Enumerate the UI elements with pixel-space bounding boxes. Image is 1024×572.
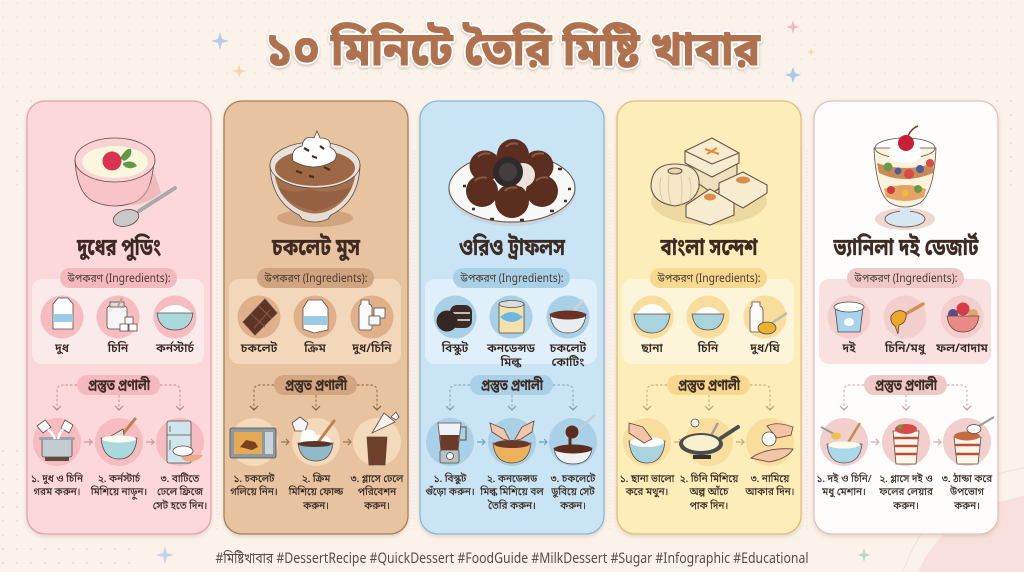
ingredient: sugar: চিনি bbox=[697, 340, 719, 357]
panel: vanilla yogurt dessert bbox=[814, 101, 998, 534]
method heading with arrows: প্রস্তুত প্রণালী bbox=[875, 376, 938, 397]
ingredients panel bbox=[229, 268, 401, 364]
panel: bengali sandesh bbox=[617, 101, 801, 534]
ingredient: biscuit: বিস্কুট bbox=[441, 340, 469, 357]
ingredients panel: উপকরণ (Ingredients): bbox=[657, 271, 760, 287]
step arrow bbox=[281, 439, 289, 445]
step arrow bbox=[736, 439, 744, 445]
hashtag footer: #মিষ্টিখাবার #DessertRecipe #QuickDessert #FoodGuide #MilkDessert #Sugar #Infographic #Educational bbox=[216, 550, 808, 569]
ingredient: sugar bbox=[686, 296, 730, 357]
step 1: মধু মেশান। bbox=[821, 487, 866, 500]
ingredient: chocolate coating: চকলেট bbox=[549, 340, 587, 357]
ingredient: cream: ক্রিম bbox=[303, 340, 326, 357]
sparkle decorations bbox=[156, 20, 871, 564]
title: ১০ মিনিটে তৈরি মিষ্টি খাবার bbox=[266, 21, 761, 85]
step arrow bbox=[933, 439, 941, 445]
step 2 bbox=[479, 418, 544, 514]
ingredient: milk and ghee bbox=[744, 296, 787, 357]
method heading with arrows: প্রস্তুত প্রণালী bbox=[88, 376, 151, 397]
step 2: অল্প আঁচে bbox=[689, 486, 729, 500]
method heading with arrows bbox=[643, 375, 774, 410]
ingredient: condensed milk: মিল্ক bbox=[500, 354, 522, 371]
panel: milk pudding bbox=[27, 101, 211, 534]
step 2: ২. ক্রিম bbox=[302, 473, 331, 487]
ingredient: milk bbox=[40, 296, 84, 357]
method heading with arrows: প্রস্তুত প্রণালী bbox=[678, 376, 741, 397]
step 1: ১. বিস্কুট bbox=[434, 473, 467, 487]
ingredient: chhana bbox=[630, 296, 674, 357]
ingredient: chocolate coating: কোটিং bbox=[552, 354, 585, 371]
ingredients panel: উপকরণ (Ingredients): bbox=[67, 271, 170, 287]
step 1: করে মথুন। bbox=[625, 487, 668, 500]
ingredient: honey: চিনি/মধু bbox=[884, 340, 927, 357]
step 3: পরিবেশন bbox=[358, 486, 397, 500]
dish name: দুধের পুডিং bbox=[76, 233, 161, 265]
step 2: ২. কনডেন্সড bbox=[487, 474, 538, 487]
icon: mousse bowl bbox=[270, 131, 360, 227]
step 1 bbox=[816, 418, 872, 500]
ingredient: milk and sugar: দুধ/চিনি bbox=[351, 340, 392, 357]
step 1 bbox=[425, 418, 475, 500]
ingredients panel: উপকরণ (Ingredients): bbox=[854, 271, 958, 287]
ingredient: cornstarch bbox=[154, 296, 196, 357]
ingredient: chocolate: চকলেট bbox=[240, 340, 278, 357]
ingredient: milk and sugar bbox=[350, 296, 394, 357]
step 3: ৩. ঠান্ডা করে bbox=[942, 473, 993, 487]
step 3 bbox=[153, 418, 207, 514]
step 1: ১. দই ও চিনি/ bbox=[816, 473, 872, 487]
step 1: গুঁড়ো করুন। bbox=[425, 486, 475, 500]
dish name: বাংলা সন্দেশ bbox=[660, 233, 758, 265]
step 2 bbox=[679, 418, 739, 514]
step 1: ১. চকলেট bbox=[233, 473, 275, 487]
ingredient: cornstarch: কর্নস্টার্চ bbox=[155, 340, 194, 357]
method heading with arrows: প্রস্তুত প্রণালী bbox=[285, 376, 348, 397]
step 1: গরম করুন। bbox=[34, 487, 80, 500]
step 3: সেট হতে দিন। bbox=[153, 500, 207, 514]
step 2: ২. গ্লাসে দই ও bbox=[879, 473, 933, 487]
method heading with arrows bbox=[53, 375, 184, 410]
step 2 bbox=[90, 418, 147, 500]
panel: chocolate mousse bbox=[224, 101, 408, 534]
step 3 bbox=[745, 418, 794, 500]
step 3: ৩. চকলেটে bbox=[551, 473, 596, 487]
step 2: মিশিয়ে নাড়ুন। bbox=[90, 486, 147, 500]
step 2: ২. চিনি মিশিয়ে bbox=[680, 473, 739, 487]
step 2 bbox=[288, 417, 344, 514]
step 1 bbox=[230, 418, 278, 500]
step arrow bbox=[146, 439, 154, 445]
ingredient: yogurt bbox=[828, 296, 870, 357]
step 2: ২. কর্নস্টার্চ bbox=[98, 473, 141, 487]
icon: parfait glass bbox=[874, 126, 936, 230]
ingredients panel bbox=[425, 268, 597, 371]
step 3: ৩. গ্লাসে ঢেলে bbox=[351, 474, 404, 487]
step 2: করুন। bbox=[302, 501, 329, 514]
ingredient: milk and ghee: দুধ/ঘি bbox=[749, 340, 780, 357]
step 3: করুন। bbox=[559, 501, 586, 514]
step 2: তৈরি করুন। bbox=[487, 500, 536, 514]
ingredient: condensed milk: কনডেন্সড bbox=[486, 341, 535, 357]
step 3: করুন। bbox=[363, 501, 390, 514]
ingredient: yogurt: দই bbox=[841, 340, 856, 357]
ingredient: chhana: ছানা bbox=[640, 341, 663, 357]
icon: sandesh sweets bbox=[651, 138, 767, 225]
step arrow bbox=[871, 439, 879, 445]
dish name: ওরিও ট্রাফলস bbox=[459, 233, 565, 265]
dish name: ভ্যানিলা দই ডেজার্ট bbox=[833, 232, 979, 265]
step 1: ১. দুধ ও চিনি bbox=[31, 473, 84, 487]
method heading with arrows bbox=[446, 375, 577, 410]
step arrow bbox=[84, 439, 92, 445]
step 2: মিল্ক মিশিয়ে বল bbox=[479, 486, 544, 500]
panel: oreo truffles bbox=[420, 101, 604, 534]
ingredient: chocolate bbox=[238, 296, 280, 357]
ingredients panel bbox=[32, 268, 204, 364]
step 3: ঢেলে ফ্রিজে bbox=[157, 486, 203, 500]
icon: truffles on plate bbox=[448, 139, 576, 226]
step 2: মিশিয়ে ফোল্ড bbox=[288, 486, 344, 500]
step 1: ১. ছানা ভালো bbox=[620, 474, 675, 487]
step 3: করুন। bbox=[953, 501, 980, 514]
step 3: ৩. নামিয়ে bbox=[751, 473, 790, 487]
step 2 bbox=[878, 418, 934, 514]
ingredient: fruit and nuts bbox=[935, 296, 988, 357]
step 1: গলিয়ে নিন। bbox=[230, 486, 278, 500]
method heading with arrows bbox=[840, 375, 971, 410]
ingredient: cream bbox=[294, 296, 336, 357]
step arrow bbox=[674, 439, 682, 445]
ingredients panel bbox=[622, 268, 794, 364]
step 2: ফলের লেয়ার bbox=[878, 487, 934, 500]
step 3 bbox=[351, 412, 404, 514]
ingredients panel bbox=[819, 268, 991, 364]
step 3: আকার দিন। bbox=[745, 486, 794, 500]
ingredient: milk: দুধ bbox=[54, 341, 70, 357]
step 2: পাক দিন। bbox=[690, 500, 728, 514]
icon: pudding bowl with spoon bbox=[75, 138, 175, 229]
method heading with arrows bbox=[250, 375, 381, 410]
step 3 bbox=[549, 415, 597, 514]
method heading with arrows: প্রস্তুত প্রণালী bbox=[481, 376, 544, 397]
step arrow bbox=[477, 439, 485, 445]
step 2: করুন। bbox=[892, 501, 919, 514]
ingredient: sugar bbox=[96, 296, 140, 357]
ingredient: biscuit bbox=[434, 296, 476, 357]
step 1 bbox=[620, 418, 675, 500]
ingredients panel: উপকরণ (Ingredients): bbox=[460, 271, 564, 287]
ingredient: condensed milk bbox=[486, 296, 535, 371]
step 1 bbox=[31, 418, 84, 500]
ingredient: sugar: চিনি bbox=[107, 340, 129, 357]
step 3: ৩. বাটিতে bbox=[161, 473, 200, 487]
step arrow bbox=[343, 439, 351, 445]
ingredient: chocolate coating bbox=[546, 296, 590, 371]
step 3: উপভোগ bbox=[949, 486, 985, 500]
ingredient: fruit and nuts: ফল/বাদাম bbox=[935, 341, 988, 357]
step 3: ডুবিয়ে সেট bbox=[550, 486, 595, 500]
ingredient: honey bbox=[884, 296, 927, 357]
step 3 bbox=[942, 417, 994, 514]
ingredients panel: উপকরণ (Ingredients): bbox=[264, 271, 368, 287]
dish name: চকলেট মুস bbox=[271, 233, 360, 265]
step arrow bbox=[539, 439, 547, 445]
